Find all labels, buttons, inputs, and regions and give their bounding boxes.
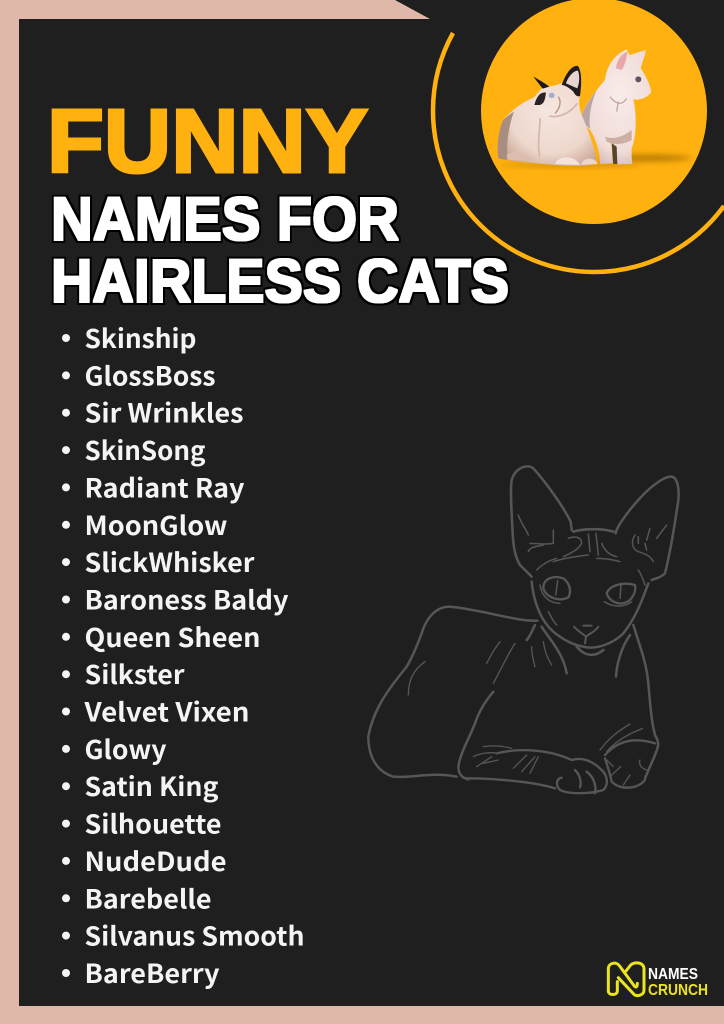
cat face details: [518, 515, 667, 643]
list item: NudeDude: NudeDude: [84, 842, 226, 879]
list item: Velvet Vixen: Velvet Vixen: [83, 692, 249, 730]
left cat: [498, 66, 598, 166]
cat shadow: [599, 154, 691, 162]
title: FUNNY: FUNNY: [47, 92, 368, 192]
list item: SkinSong: SkinSong: [84, 431, 206, 468]
list item: SlickWhisker: SlickWhisker: [84, 543, 255, 580]
list item: Queen Sheen: Queen Sheen: [84, 618, 260, 655]
list item: MoonGlow: MoonGlow: [84, 506, 228, 543]
logo word CRUNCH: CRUNCH: [648, 982, 708, 999]
list item: Barebelle: Barebelle: [84, 879, 212, 916]
logo: Names Crunch: [608, 963, 708, 999]
list item: GlossBoss: GlossBoss: [84, 356, 216, 393]
cat line drawing: [368, 466, 679, 793]
list item: Silhouette: Silhouette: [84, 805, 222, 842]
list item: Satin King: Satin King: [84, 767, 219, 804]
list item: Skinship: Skinship: [84, 319, 196, 356]
right cat: [582, 49, 651, 164]
list item: Glowy: Glowy: [84, 730, 167, 767]
cat outline: [368, 466, 679, 779]
list item: BareBerry: BareBerry: [84, 954, 220, 991]
list item: Silvanus Smooth: Silvanus Smooth: [84, 917, 304, 954]
logo mark: [608, 963, 644, 996]
cat paws: [467, 724, 655, 793]
name list: [62, 319, 304, 991]
list item: Radiant Ray: Radiant Ray: [84, 468, 245, 505]
logo word NAMES: NAMES: [648, 966, 698, 983]
title: HAIRLESS CATS: HAIRLESS CATS: [51, 247, 509, 315]
ring arc: [433, 33, 724, 272]
list item: Silkster: Silkster: [84, 655, 185, 692]
title: NAMES FOR: NAMES FOR: [51, 185, 399, 253]
list item: Baroness Baldy: Baroness Baldy: [84, 580, 289, 618]
yellow circle with cats: [481, 0, 707, 224]
list item: Sir Wrinkles: Sir Wrinkles: [84, 394, 244, 431]
cats photo illustration: [498, 49, 651, 166]
